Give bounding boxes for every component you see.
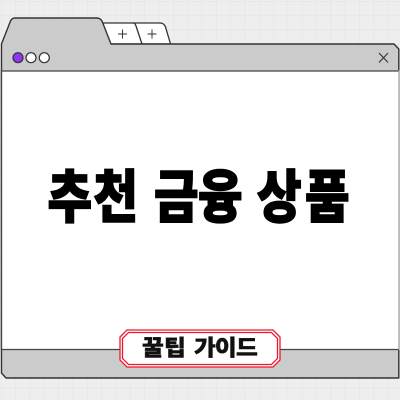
tab: first plus tab <box>102 23 142 44</box>
content pane <box>2 70 399 350</box>
badge label: 꿀팁 가이드 <box>142 335 258 360</box>
icon: close <box>379 53 388 62</box>
tab: second plus tab <box>133 23 170 44</box>
title: 추천 금융 상품 <box>48 166 350 230</box>
window control dots <box>13 53 49 63</box>
badge <box>120 330 280 367</box>
